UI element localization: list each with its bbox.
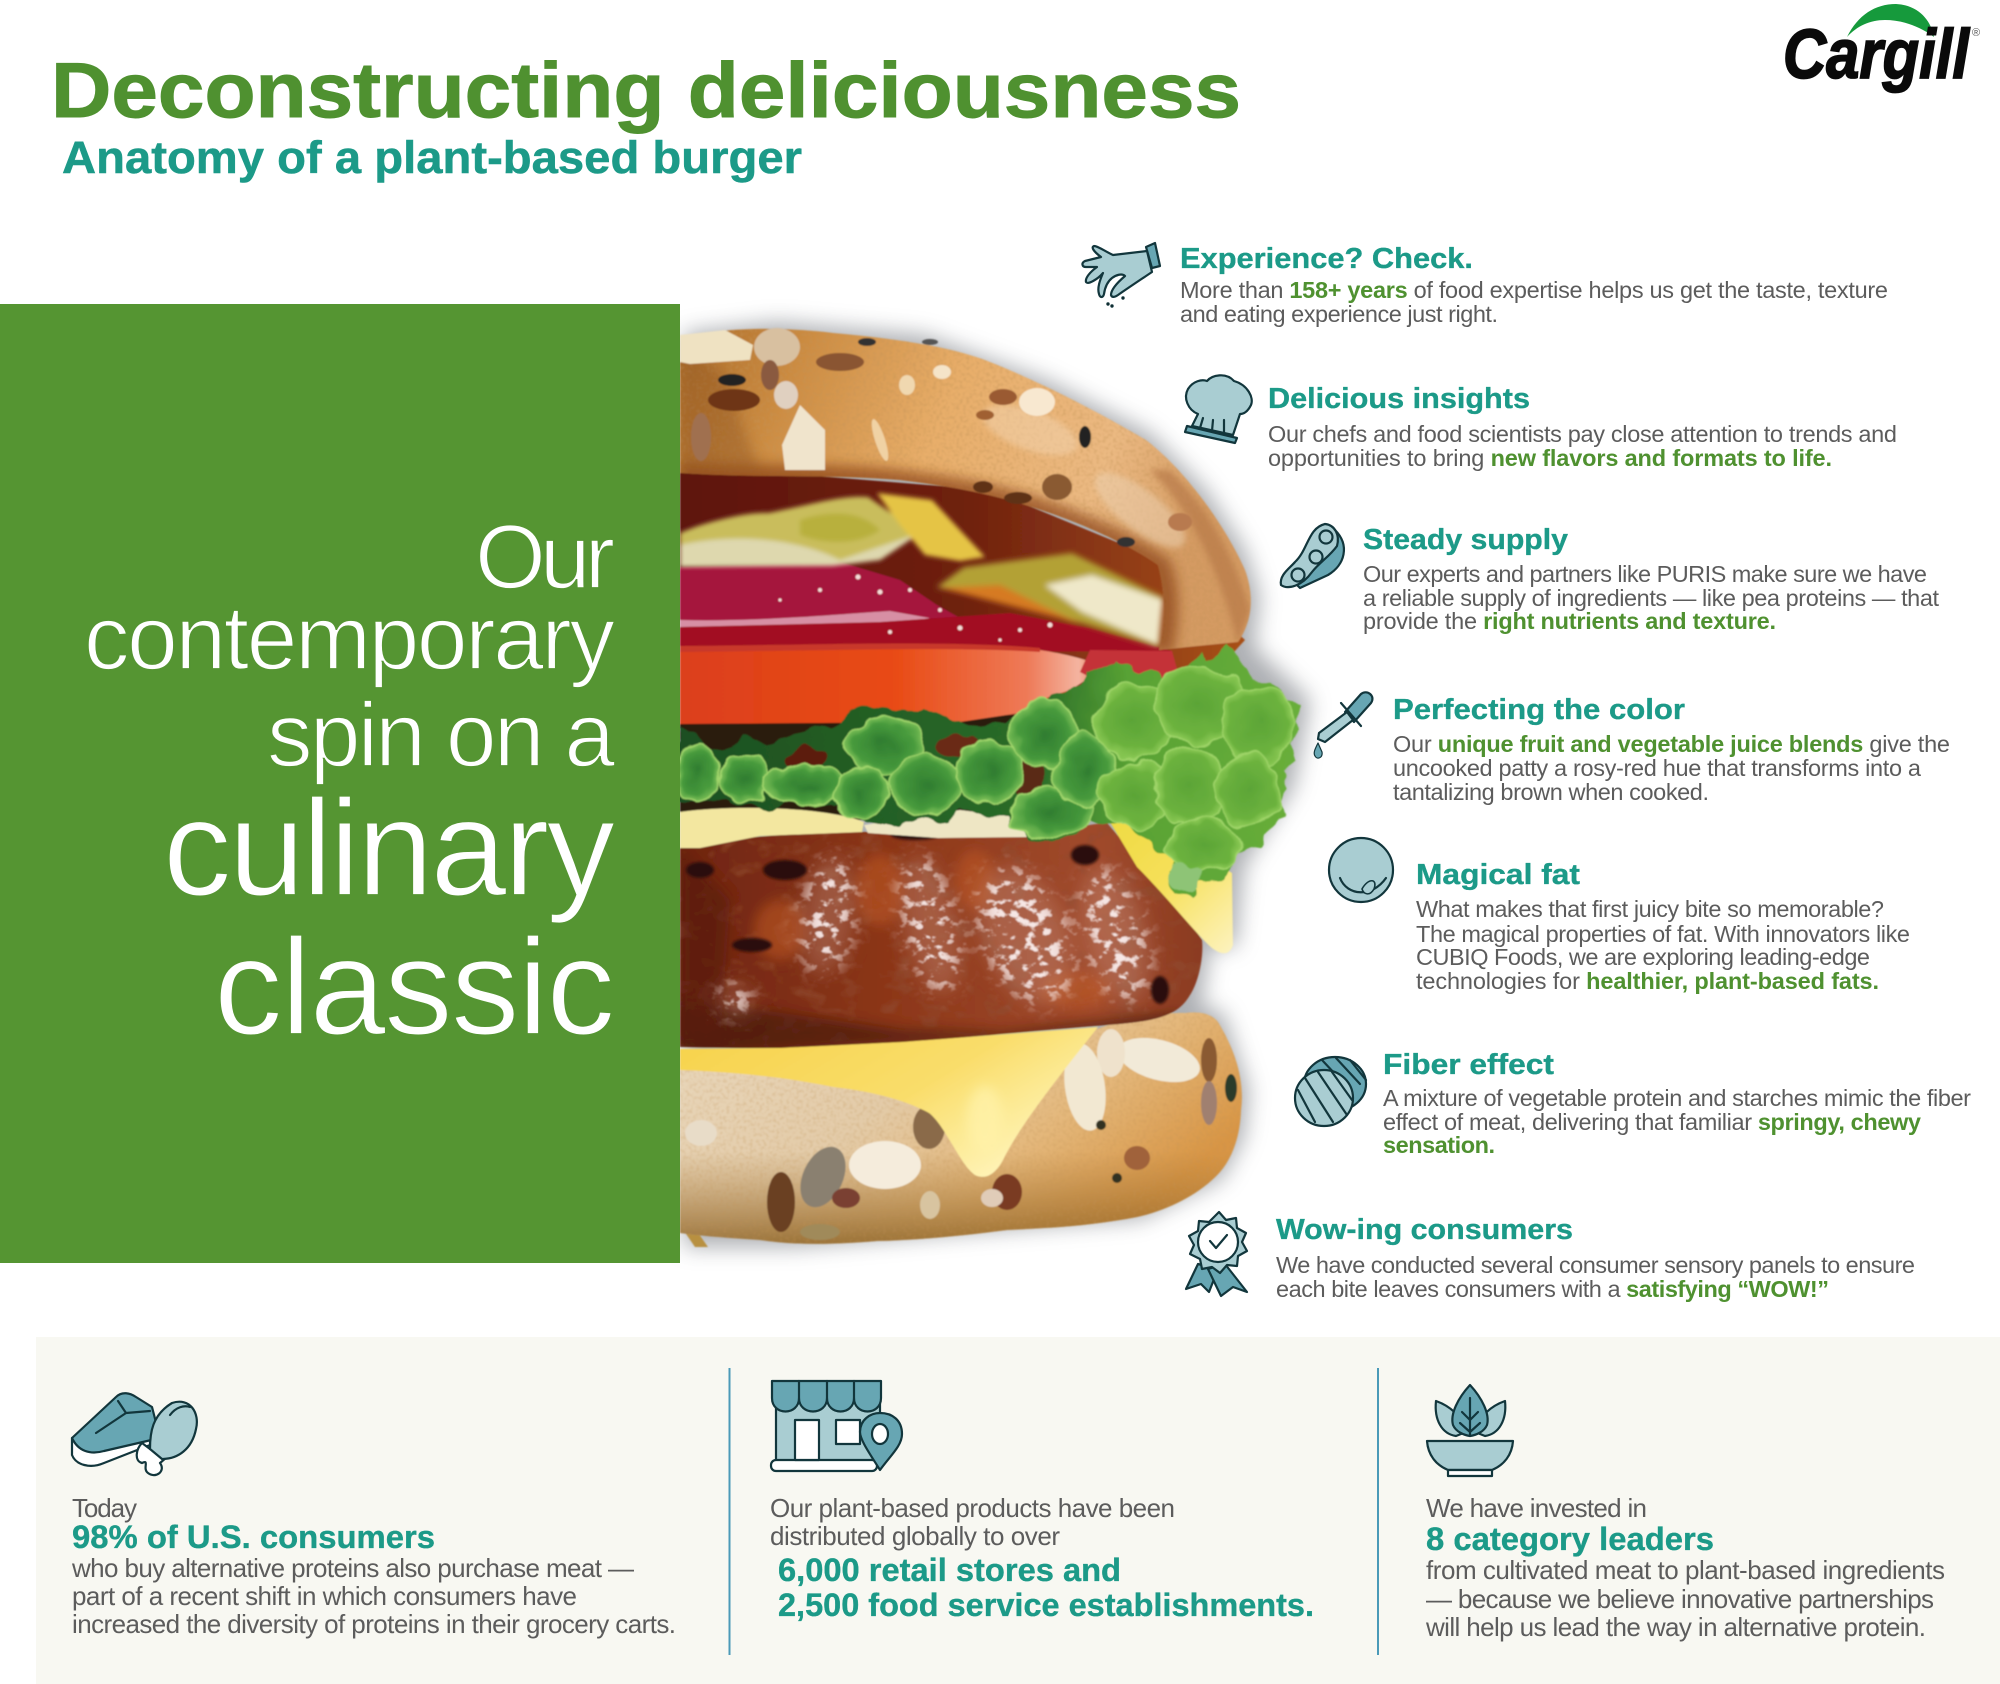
- pale cheese strip: [864, 810, 1080, 838]
- item: Delicious insights: [1185, 375, 1897, 471]
- body: Our chefs and food scientists pay close attention to trends and: [1268, 421, 1897, 447]
- stat heading: 6,000 retail stores and: [778, 1552, 1121, 1588]
- item: Wow-ing consumers: [1186, 1212, 1915, 1302]
- icon: dropper: [1314, 692, 1372, 758]
- bottom bun seeds: [685, 1029, 1237, 1240]
- icon: licking face: [1329, 838, 1393, 902]
- stat heading: 98% of U.S. consumers: [72, 1519, 435, 1555]
- body: each bite leaves consumers with a satisfying “WOW!”: [1276, 1276, 1829, 1302]
- body: tantalizing brown when cooked.: [1393, 779, 1709, 805]
- divider: [728, 1368, 730, 1655]
- icon: plant bowl: [1427, 1385, 1513, 1476]
- item: Perfecting the color: [1314, 692, 1950, 805]
- body: will help us lead the way in alternative protein.: [1425, 1612, 1926, 1642]
- body: Our experts and partners like PURIS make sure we have: [1363, 561, 1927, 587]
- logo: Cargill: Cargill: [1783, 15, 1970, 93]
- heading: Fiber effect: [1383, 1049, 1554, 1081]
- body: from cultivated meat to plant-based ingredients: [1426, 1555, 1945, 1585]
- stat heading: 2,500 food service establishments.: [778, 1587, 1314, 1623]
- statement text: spin on a: [267, 685, 615, 786]
- body: [1425, 1555, 1945, 1642]
- tomato slice: [680, 644, 1180, 724]
- heading: Perfecting the color: [1393, 694, 1685, 726]
- body: a reliable supply of ingredients — like pea proteins — that: [1363, 585, 1939, 611]
- body: Our plant-based products have been: [770, 1493, 1175, 1523]
- body: provide the right nutrients and texture.: [1363, 608, 1776, 634]
- body: part of a recent shift in which consumers have: [72, 1581, 577, 1611]
- statement text: contemporary: [84, 588, 616, 689]
- patty: [680, 820, 1210, 1055]
- body: and eating experience just right.: [1180, 301, 1498, 327]
- statement text: classic: [214, 911, 615, 1064]
- subtitle: Anatomy of a plant-based burger: [62, 132, 802, 183]
- dark gap under lettuce: [680, 715, 1110, 820]
- icon: chef hat: [1185, 375, 1252, 443]
- body: A mixture of vegetable protein and starches mimic the fiber: [1383, 1085, 1971, 1111]
- body: distributed globally to over: [770, 1521, 1060, 1551]
- body: CUBIQ Foods, we are exploring leading-edge: [1416, 944, 1870, 970]
- logo: Cargill: ®: [1972, 27, 1980, 39]
- stat: consumers: [71, 1393, 676, 1639]
- title: Deconstructing deliciousness: [51, 46, 1241, 134]
- top bun: [680, 325, 1255, 652]
- statement text: culinary: [163, 772, 616, 925]
- panel: green statement: [0, 304, 680, 1263]
- body: [1268, 421, 1897, 471]
- body: opportunities to bring new flavors and formats to life.: [1268, 445, 1832, 471]
- heading: Steady supply: [1363, 524, 1568, 556]
- statement text: Our: [475, 507, 615, 608]
- icon: store with pin: [771, 1381, 902, 1471]
- statement text: [84, 507, 616, 1064]
- body: More than 158+ years of food expertise helps us get the taste, texture: [1180, 277, 1888, 303]
- pickle right: [937, 553, 1163, 647]
- icon: steak and drumstick: [72, 1393, 197, 1475]
- item: Steady supply: [1281, 524, 1939, 634]
- burger illustration: [678, 322, 1310, 1247]
- body: effect of meat, delivering that familiar springy, chewy: [1383, 1109, 1921, 1135]
- heading: Delicious insights: [1268, 383, 1530, 415]
- body: What makes that first juicy bite so memorable?: [1416, 896, 1884, 922]
- stat: category leaders: [1425, 1385, 1945, 1642]
- body: increased the diversity of proteins in their grocery carts.: [72, 1609, 676, 1639]
- burger drop shadow: [684, 322, 1310, 1247]
- item: Experience? Check.: [1082, 243, 1888, 327]
- body: Our unique fruit and vegetable juice blends give the: [1393, 731, 1950, 757]
- heading: Wow-ing consumers: [1276, 1214, 1573, 1246]
- bottom cheese: [680, 1027, 1098, 1177]
- body: sensation.: [1383, 1132, 1495, 1158]
- icon: gloved hand: [1082, 243, 1160, 307]
- body: [71, 1553, 676, 1639]
- body: [1393, 731, 1950, 805]
- body: [1276, 1252, 1915, 1302]
- body: The magical properties of fat. With innovators like: [1416, 921, 1910, 947]
- body: We have invested in: [1426, 1493, 1647, 1523]
- pickle left: [680, 493, 985, 567]
- bottom bun: [680, 1010, 1245, 1247]
- body: [1416, 896, 1910, 994]
- text: Today: Today: [72, 1493, 137, 1523]
- panel: bottom stats: [36, 1337, 2000, 1684]
- filling backing: [680, 465, 1245, 820]
- icon: fiber discs: [1295, 1057, 1366, 1126]
- body: [1180, 277, 1888, 327]
- body: uncooked patty a rosy-red hue that transforms into a: [1393, 755, 1922, 781]
- item: Fiber effect: [1295, 1049, 1971, 1158]
- body: [1383, 1085, 1971, 1158]
- stat heading: 8 category leaders: [1426, 1521, 1714, 1557]
- body: technologies for healthier, plant-based fats.: [1416, 968, 1879, 994]
- heading: Experience? Check.: [1180, 243, 1473, 275]
- body: [1363, 561, 1939, 634]
- right cheese: [1081, 803, 1233, 953]
- stat: retail stores: [770, 1381, 1314, 1623]
- body: who buy alternative proteins also purchase meat —: [71, 1553, 634, 1583]
- divider: [1377, 1368, 1379, 1655]
- top-left cheese: [680, 808, 864, 848]
- icon: rosette: [1186, 1212, 1247, 1296]
- body: [770, 1493, 1175, 1551]
- body: — because we believe innovative partnerships: [1426, 1584, 1934, 1614]
- item: Magical fat: [1329, 838, 1910, 994]
- icon: pea pod: [1281, 524, 1344, 588]
- lettuce: [678, 643, 1302, 895]
- stat heading: [778, 1552, 1314, 1623]
- heading: Magical fat: [1416, 859, 1580, 891]
- onion slices: [680, 562, 1172, 652]
- body: We have conducted several consumer sensory panels to ensure: [1276, 1252, 1915, 1278]
- bun seeds: [680, 328, 1192, 547]
